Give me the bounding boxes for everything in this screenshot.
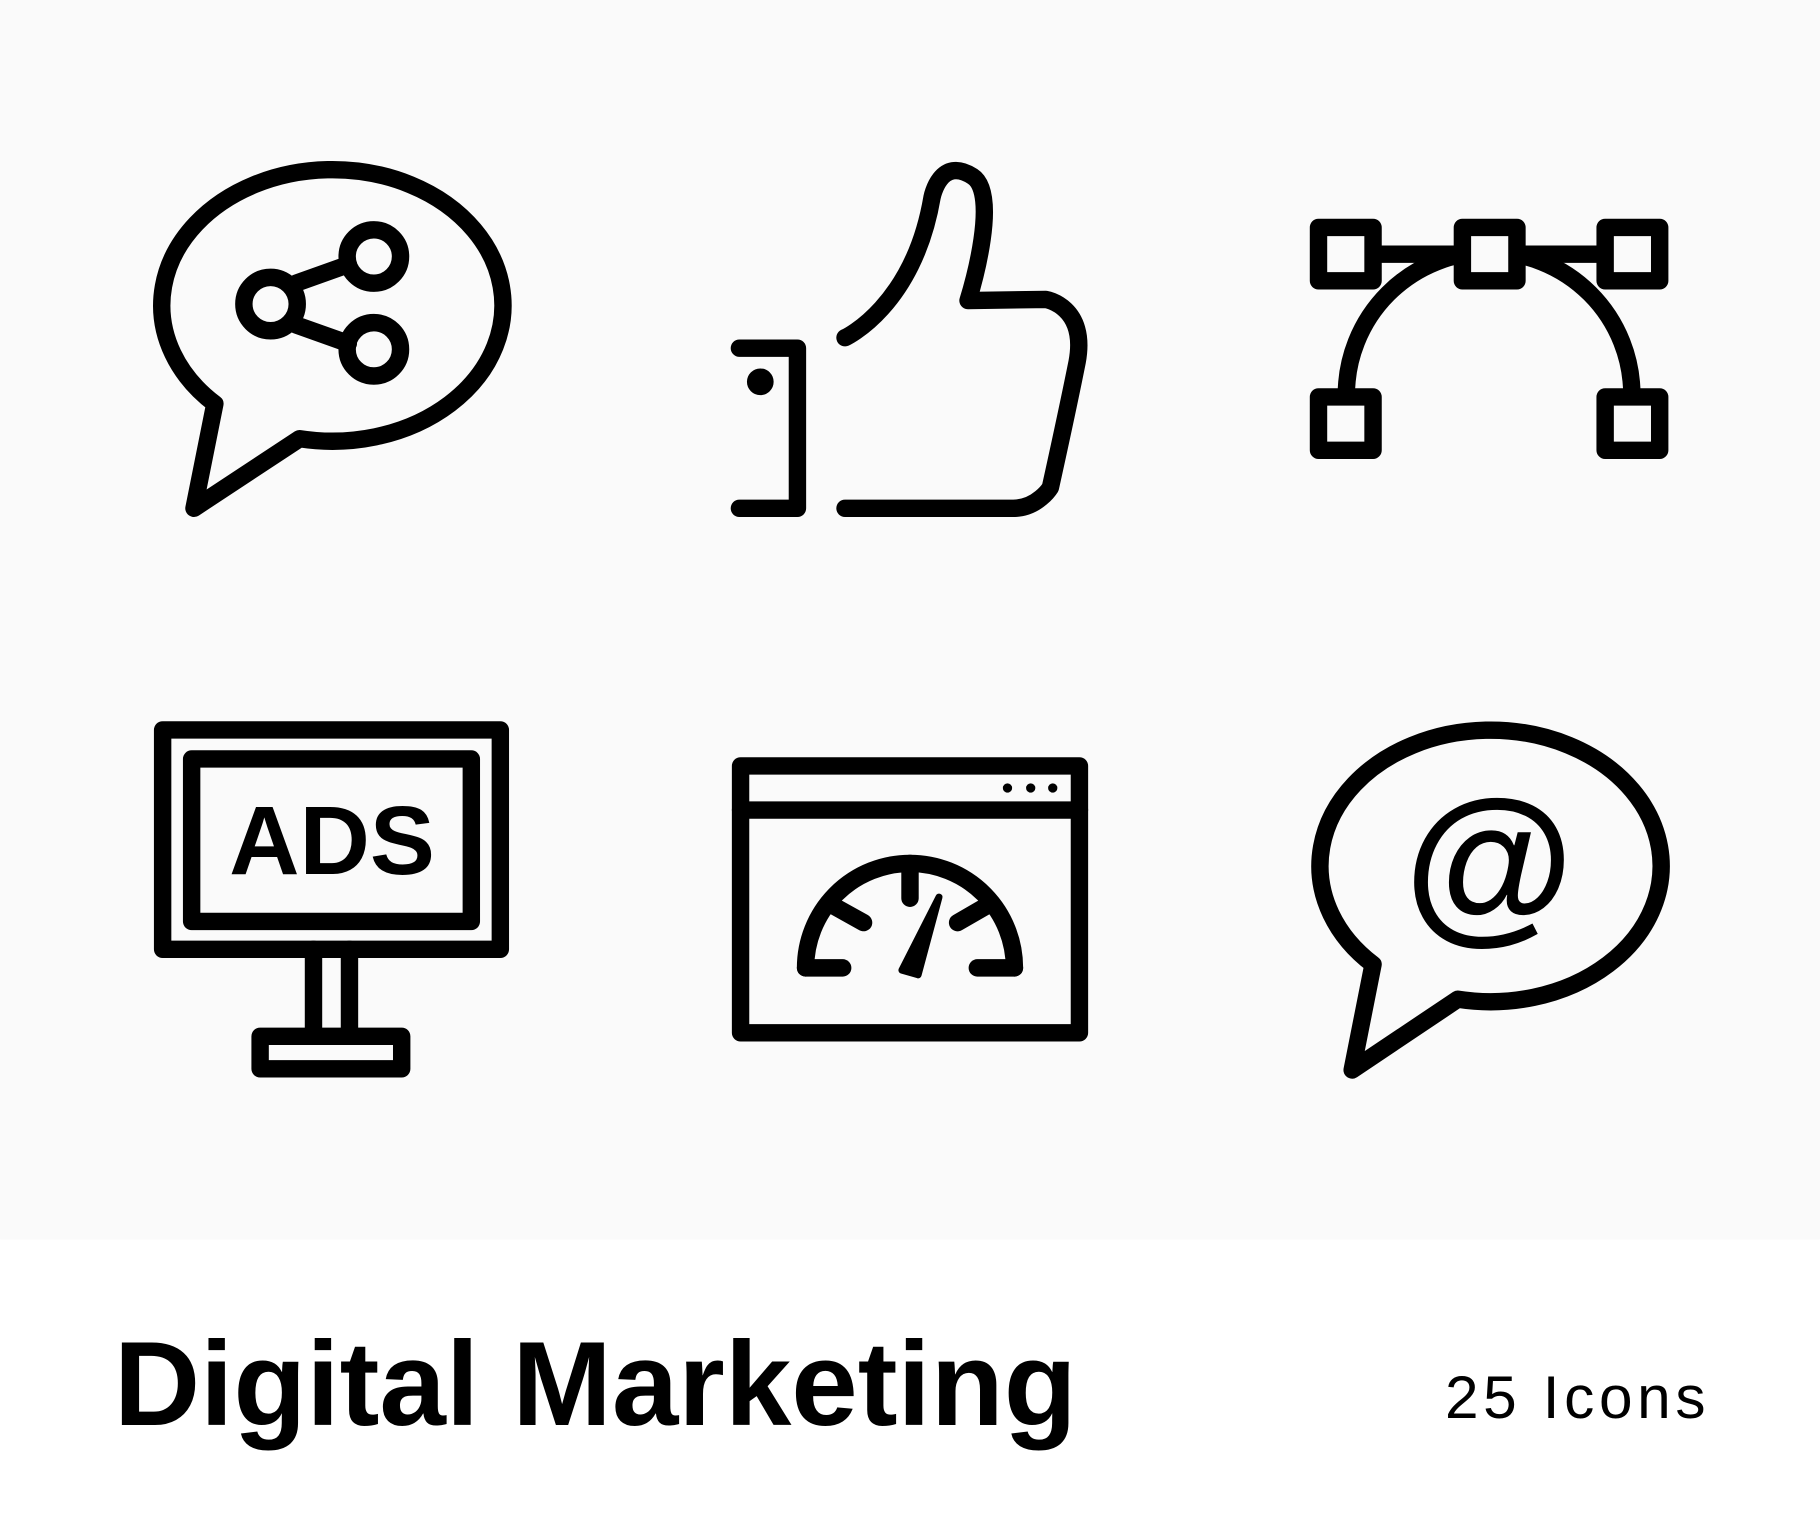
icon: ads monitor: ADS: [229, 786, 435, 895]
icon: email speech bubble: [1320, 730, 1661, 1070]
title: Digital Marketing: [114, 1318, 1077, 1451]
icon: bezier curve: [1319, 227, 1660, 450]
icon: ads monitor: [163, 730, 500, 1069]
icon: browser speed gauge: [741, 766, 1079, 1033]
icon: share speech bubble: [162, 170, 503, 508]
icon count: 25 Icons: [1445, 1363, 1710, 1431]
icon: thumbs up: [739, 171, 1079, 508]
icon: email speech bubble: @: [1404, 763, 1574, 958]
